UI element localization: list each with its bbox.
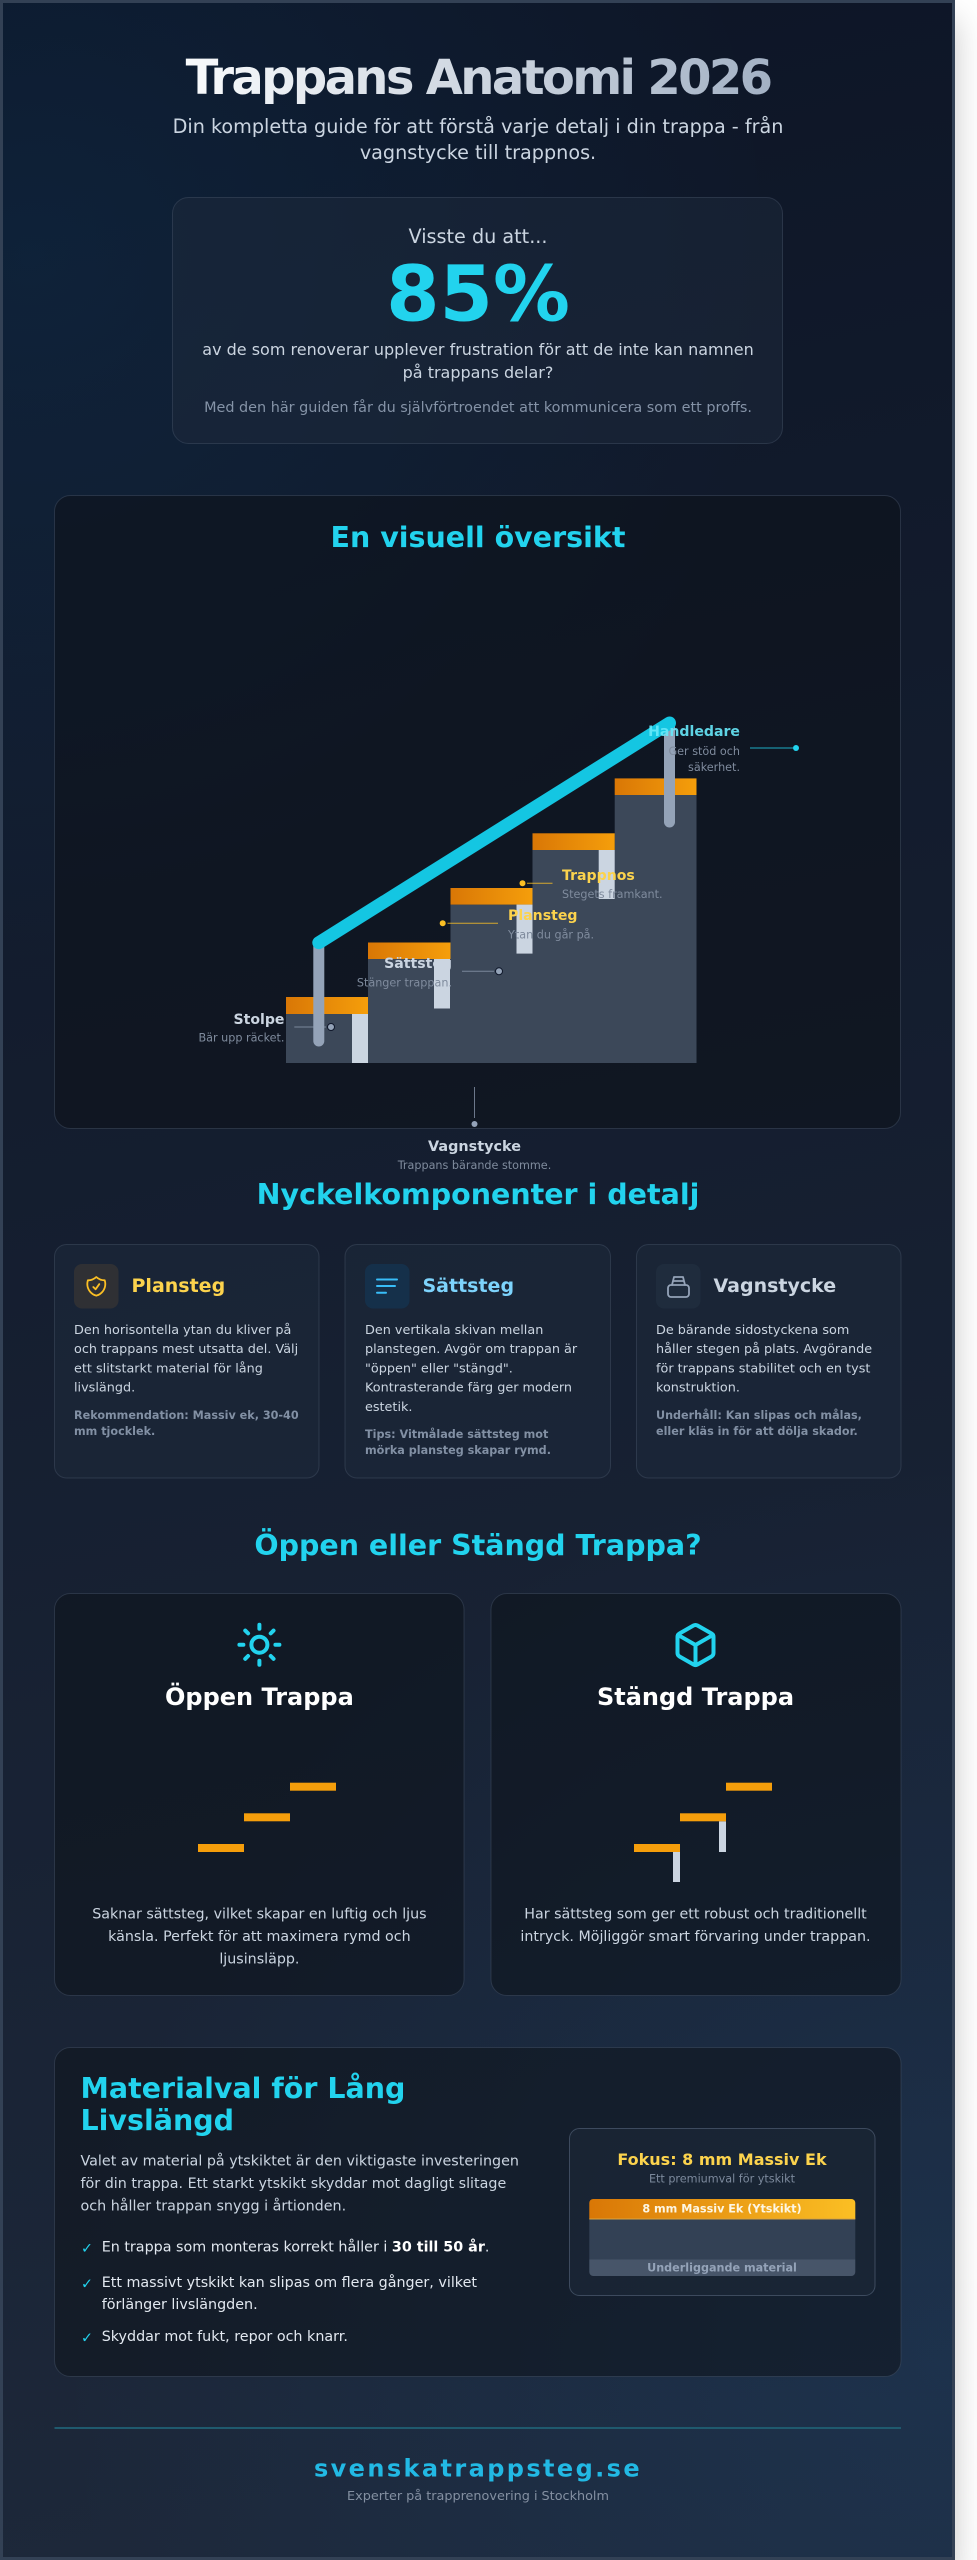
list of benefits: Ett massivt ytskikt kan slipas om flera gånger, vilket [102, 2274, 477, 2291]
brand name: svenskatrappsteg.se [314, 2455, 642, 2483]
card description: känsla. Perfekt för att maximera rymd och [108, 1929, 411, 1945]
subtitle: vagnstycke till trappnos. [360, 141, 596, 164]
big number: 85% [386, 250, 570, 340]
heading: material: Livslängd [80, 2104, 234, 2137]
callout: Sättsteg [357, 956, 502, 990]
card description: Saknar sättsteg, vilket skapar en luftig och ljus [92, 1907, 427, 1923]
treads [286, 778, 696, 1014]
card description: Har sättsteg som ger ett robust och traditionellt [524, 1907, 867, 1923]
statistic description: av de som renoverar upplever frustration för att de inte kan namnen [202, 340, 754, 359]
focus title: Fokus: 8 mm Massiv Ek [617, 2150, 827, 2169]
list of benefits: förlänger livslängden. [102, 2297, 258, 2313]
panel: closed stair [491, 1594, 901, 1996]
callout: Plansteg [440, 908, 594, 942]
handrail [319, 723, 670, 943]
intro text: och håller trappan snygg i årtionden. [80, 2197, 346, 2214]
callout: Handledare [648, 724, 799, 774]
heading: open or closed: Öppen eller Stängd Trappa? [254, 1528, 702, 1562]
diagram: open steps [198, 1783, 336, 1852]
card description: konstruktion. [656, 1380, 740, 1396]
list of benefits: ✓ [81, 2276, 93, 2292]
layer diagram: 8 mm Massiv Ek (Ytskikt) [642, 2203, 802, 2216]
callout: Sättsteg: Sättsteg [384, 956, 452, 972]
heading: material: Materialval för Lång [80, 2072, 405, 2105]
statistic description: på trappans delar? [403, 363, 553, 382]
card description: planstegen. Avgör om trappan är [365, 1342, 578, 1357]
lead-in text: Visste du att... [408, 225, 548, 248]
callout: Stolpe: Bär upp räcket. [198, 1032, 284, 1045]
card description: håller stegen på plats. Avgörande [656, 1342, 872, 1357]
intro text: Valet av material på ytskiktet är den viktigaste investeringen [80, 2153, 519, 2170]
card description: estetik. [365, 1400, 412, 1415]
card description: Kontrasterande färg ger modern [365, 1380, 572, 1396]
callout: Handledare: Handledare [648, 724, 740, 740]
layer diagram: Underliggande material [647, 2262, 797, 2275]
header [173, 50, 783, 164]
card description: och trappans mest utsatta del. Välj [74, 1342, 298, 1357]
card title: Plansteg [132, 1275, 225, 1297]
card description: "öppen" eller "stängd". [365, 1362, 513, 1376]
stair body [286, 795, 696, 1063]
subtitle: Din kompletta guide för att förstå varje detalj i din trappa - från [173, 115, 783, 138]
panel: material choice [54, 2048, 901, 2376]
list of benefits [81, 2239, 489, 2346]
card description: De bärande sidostyckena som [656, 1323, 849, 1338]
callout: Trappnos: Trappnos [562, 868, 635, 884]
panel: statistic callout [172, 198, 782, 444]
icon: shield [74, 1264, 118, 1308]
card title: Stängd Trappa [597, 1683, 794, 1711]
icon: stringer [656, 1264, 700, 1308]
panel: open stair [54, 1594, 464, 1996]
maintenance note: eller kläs in för att dölja skador. [656, 1425, 858, 1438]
card description: Den vertikala skivan mellan [365, 1323, 543, 1338]
callout: Stolpe: Stolpe [233, 1012, 284, 1028]
callout: Vagnstycke [397, 1087, 551, 1172]
diagram: closed steps [634, 1783, 772, 1882]
tagline: Experter på trapprenovering i Stockholm [347, 2489, 609, 2504]
heading: key components: Nyckelkomponenter i detalj [257, 1178, 699, 1211]
callout: Handledare: säkerhet. [688, 761, 740, 774]
layer diagram [589, 2199, 855, 2276]
list of benefits: ✓ [81, 2330, 93, 2346]
posts [319, 723, 670, 1041]
card description: Den horisontella ytan du kliver på [74, 1323, 291, 1338]
stair diagram [286, 723, 696, 1063]
card description: intryck. Möjliggör smart förvaring under trappan. [520, 1929, 871, 1945]
callout: Vagnstycke: Trappans bärande stomme. [397, 1159, 551, 1172]
recommendation: mm tjocklek. [74, 1425, 155, 1438]
icon: box [678, 1625, 714, 1665]
card description: ljusinsläpp. [219, 1952, 299, 1968]
list of benefits: En trappa som monteras korrekt håller i 30 till 50 år. [102, 2239, 489, 2256]
card description: ett slitstarkt material för lång [74, 1362, 263, 1376]
callout: Plansteg: Ytan du går på. [507, 928, 594, 942]
intro text: för din trappa. Ett starkt ytskikt skyddar mot dagligt slitage [80, 2176, 506, 2192]
heading: overview: En visuell översikt [331, 521, 625, 554]
panel: Plansteg card [54, 1244, 319, 1478]
callout: Trappnos [520, 868, 663, 901]
callout: Sättsteg: Stänger trappan. [357, 977, 452, 990]
card title: Sättsteg [422, 1275, 514, 1297]
callout: Handledare: Ger stöd och [668, 745, 740, 758]
icon: lines [365, 1264, 410, 1308]
icon: sun [239, 1625, 279, 1665]
callout: Vagnstycke: Vagnstycke [428, 1139, 521, 1155]
panel: Vagnstycke card [636, 1244, 901, 1478]
guide note: Med den här guiden får du självförtroendet att kommunicera som ett proffs. [204, 399, 752, 416]
tip: mörka plansteg skapar rymd. [365, 1444, 551, 1457]
list of benefits: ✓ [81, 2241, 93, 2257]
callout: Stolpe [198, 1012, 334, 1045]
recommendation: Rekommendation: Massiv ek, 30-40 [74, 1409, 299, 1422]
callout: Plansteg: Plansteg [508, 908, 577, 924]
card title: Vagnstycke [714, 1275, 836, 1297]
card title: Öppen Trappa [165, 1681, 354, 1711]
panel: Sättsteg card [345, 1244, 610, 1478]
panel: focus material [570, 2128, 875, 2296]
risers [352, 850, 615, 1063]
title: Trappans Anatomi 2026 [186, 50, 771, 106]
card description: för trappans stabilitet och en tyst [656, 1362, 870, 1376]
list of benefits: Skyddar mot fukt, repor och knarr. [102, 2329, 348, 2345]
footer [54, 2427, 901, 2504]
panel: visual overview [54, 496, 900, 1172]
maintenance note: Underhåll: Kan slipas och målas, [656, 1409, 862, 1422]
tip: Tips: Vitmålade sättsteg mot [365, 1428, 549, 1441]
card description: livslängd. [74, 1380, 135, 1396]
callout: Trappnos: Stegets framkant. [562, 888, 663, 901]
focus subtitle: Ett premiumval för ytskikt [649, 2173, 796, 2186]
